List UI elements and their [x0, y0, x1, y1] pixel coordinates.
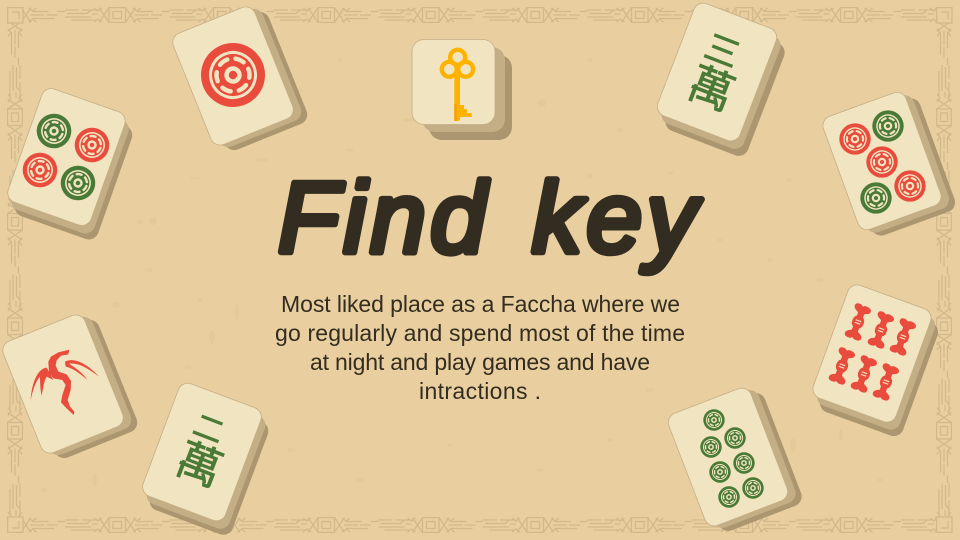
- tile: two wan: [140, 380, 271, 538]
- seven-circle symbols: [697, 406, 767, 511]
- tile: dragon: [0, 312, 140, 461]
- four-circle symbols: [18, 109, 114, 205]
- tile: four circles: [5, 86, 135, 242]
- character: two wan: 萬: [169, 424, 233, 499]
- icon: key: [442, 50, 473, 121]
- background speckles: [41, 39, 883, 492]
- tile: six bones: [810, 282, 941, 439]
- body text: [275, 291, 685, 404]
- icon: red dragon: [31, 350, 99, 415]
- tile: three wan: [654, 0, 788, 159]
- tile: five circles: [820, 90, 958, 238]
- one-circle symbol: [191, 33, 275, 117]
- key tile: [412, 40, 512, 140]
- title: key: [532, 162, 703, 274]
- six-bone symbols: [828, 303, 917, 401]
- body text: intractions .: [419, 378, 541, 404]
- body text: go regularly and spend most of the time: [275, 320, 685, 346]
- tile: one circle: [170, 4, 310, 153]
- body text: at night and play games and have: [310, 349, 650, 375]
- character: three wan: [681, 19, 748, 123]
- body text: Most liked place as a Faccha where we: [281, 291, 680, 317]
- character: two wan: 二: [188, 400, 232, 452]
- title: Find: [278, 162, 491, 274]
- character: three wan: 萬: [681, 48, 745, 123]
- five-circle symbols: [835, 106, 930, 218]
- tile: seven circles: [665, 385, 805, 534]
- character: three wan: 三: [699, 19, 748, 77]
